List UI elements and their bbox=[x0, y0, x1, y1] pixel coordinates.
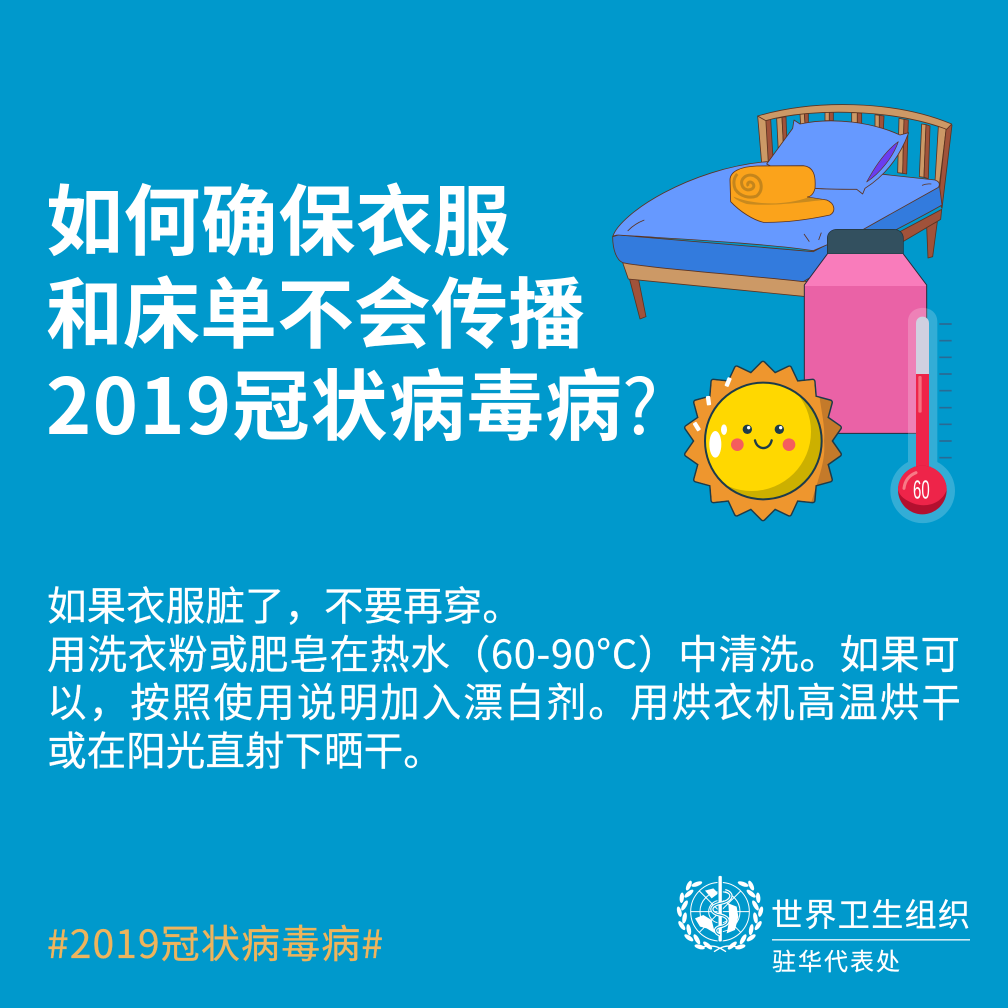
wrinkles bbox=[628, 184, 931, 242]
sun face bbox=[704, 382, 823, 500]
pillow fold bbox=[867, 142, 898, 182]
wreath right bbox=[727, 880, 764, 951]
staff and serpent bbox=[712, 875, 731, 942]
title: 如何确保衣服 bbox=[46, 161, 510, 272]
glass halo bbox=[890, 308, 955, 523]
hashtag: #2019冠状病毒病# bbox=[47, 914, 383, 970]
sun rays bbox=[687, 364, 839, 518]
body text bbox=[47, 575, 961, 777]
body text: 用洗衣粉或肥皂在热水（60-90°C）中清洗。如果可 bbox=[47, 623, 960, 680]
frame bbox=[623, 209, 942, 297]
pillow bbox=[767, 120, 909, 194]
organisation name: 世界卫生组织 bbox=[771, 890, 970, 936]
rolled towel bbox=[730, 166, 834, 222]
ray highlights bbox=[692, 377, 732, 432]
bottle outline bbox=[804, 254, 927, 433]
headboard bbox=[758, 105, 952, 208]
illustration: bed bbox=[613, 105, 952, 319]
mattress side bbox=[613, 185, 942, 282]
WHO emblem bbox=[676, 875, 764, 952]
title: 和床单不会传播 bbox=[46, 254, 585, 365]
wreath ties bbox=[703, 946, 737, 952]
continents bbox=[695, 888, 738, 933]
bottle body bbox=[804, 286, 927, 433]
bottle shoulder bbox=[804, 254, 927, 287]
illustration: detergent bottle bbox=[804, 229, 927, 433]
office name: 驻华代表处 bbox=[772, 942, 900, 977]
rays lit side bbox=[687, 364, 839, 518]
body text: 以，按照使用说明加入漂白剂。用烘衣机高温烘干 bbox=[47, 672, 961, 729]
mercury bbox=[916, 374, 929, 471]
body text: 或在阳光直射下晒干。 bbox=[47, 720, 443, 777]
tube top bbox=[916, 317, 929, 374]
bulb bbox=[898, 466, 947, 514]
illustration: thermometer bbox=[890, 308, 955, 523]
legs bbox=[629, 222, 937, 319]
title bbox=[46, 161, 658, 457]
WHO logo bbox=[676, 875, 970, 977]
wreath left bbox=[676, 880, 713, 951]
mattress top bbox=[613, 162, 939, 251]
scale ticks bbox=[939, 324, 952, 458]
illustration: smiling sun bbox=[687, 364, 839, 518]
body text: 如果衣服脏了，不要再穿。 bbox=[47, 575, 522, 632]
globe bbox=[691, 882, 749, 941]
title: ? bbox=[622, 346, 658, 456]
bottle cap bbox=[827, 229, 903, 254]
title: 2019冠状病毒病 bbox=[46, 346, 622, 457]
bulb: 60 bbox=[913, 475, 930, 505]
